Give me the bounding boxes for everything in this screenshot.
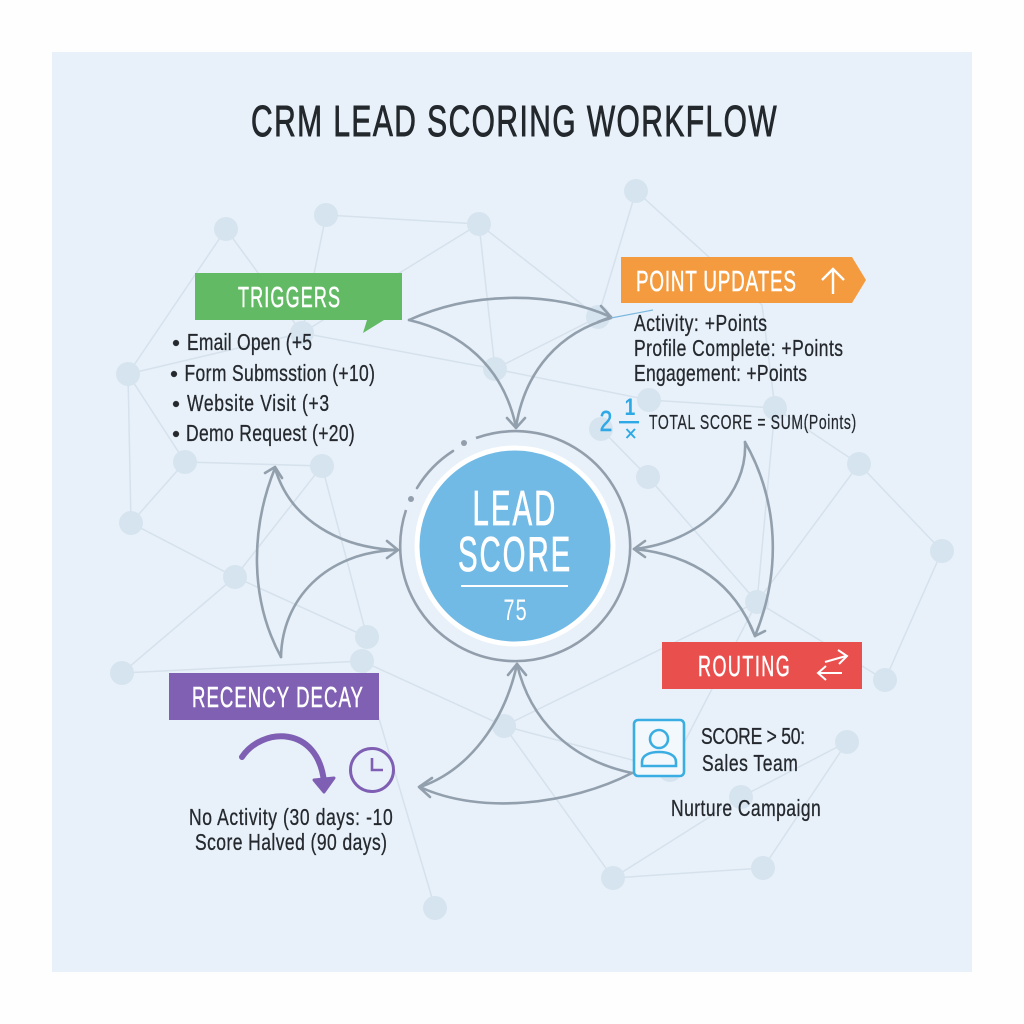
decay text [189, 806, 393, 856]
trigger list: Form Submsstion (+10) [184, 362, 375, 387]
score value: 75 [504, 594, 527, 627]
label lead score: LEAD [472, 480, 555, 536]
arrow: triggers to score [409, 320, 525, 428]
title: CRM LEAD SCORING WORKFLOW [251, 96, 777, 145]
routing text: SCORE > 50: [701, 725, 805, 750]
heading: point updates [621, 257, 866, 303]
arrow: triggers to point updates [409, 298, 611, 322]
heading: recency decay [169, 673, 379, 720]
routing text [671, 725, 821, 822]
network background [110, 179, 954, 920]
routing text: Nurture Campaign [671, 797, 821, 822]
formula: TOTAL SCORE = SUM(Points) [649, 410, 856, 434]
heading: triggers: TRIGGERS [238, 282, 340, 314]
heading: recency decay: RECENCY DECAY [192, 682, 363, 714]
arrow: recency to triggers [257, 467, 282, 657]
point list: Activity: +Points [634, 312, 767, 337]
decay text: No Activity (30 days: -10 [189, 806, 393, 831]
icon: fraction formula [600, 393, 639, 438]
icon: swap arrows [818, 650, 847, 680]
arrow: recency to score [281, 541, 398, 657]
icon: fraction formula: 2 [600, 404, 612, 438]
panel: point updates [600, 257, 866, 438]
arrow: triggers to score left [275, 468, 397, 550]
panel: recency decay [169, 673, 394, 856]
outer ring [400, 431, 630, 661]
heading: routing [662, 642, 862, 689]
routing text: Sales Team [702, 752, 798, 777]
arrow: total score to score [634, 442, 745, 557]
point list: Engagement: +Points [634, 362, 807, 387]
arrow: total score to routing [745, 442, 773, 636]
trigger list: Website Visit (+3 [187, 392, 329, 417]
heading: point updates: POINT UPDATES [636, 266, 796, 298]
accent stroke near point updates [611, 310, 653, 318]
panel: triggers [171, 273, 402, 447]
icon: clock [350, 748, 394, 792]
arrow: routing side to score [508, 664, 632, 773]
center lead score: SCORE [458, 526, 570, 582]
icon: person [634, 720, 684, 776]
panel: routing [634, 642, 862, 822]
decay text: Score Halved (90 days) [195, 831, 387, 856]
trigger list [171, 331, 375, 447]
icon: decay arrow [242, 736, 334, 792]
flow arrows [257, 298, 773, 803]
trigger list: Demo Request (+20) [186, 422, 355, 447]
score disc [417, 448, 613, 644]
heading: routing: ROUTING [698, 651, 790, 683]
point list: Profile Complete: +Points [634, 337, 843, 362]
arrow: point updates to score [516, 318, 611, 427]
icon: up arrow [822, 269, 844, 294]
heading: triggers [195, 273, 402, 333]
trigger list: Email Open (+5 [187, 331, 312, 356]
center lead score [400, 431, 630, 661]
arrow: routing to recency [419, 773, 632, 803]
arrow: routing to score [634, 549, 755, 636]
arrow: recency side to score [420, 664, 517, 787]
icon: fraction formula: 1 [625, 393, 635, 421]
point list [634, 312, 843, 387]
